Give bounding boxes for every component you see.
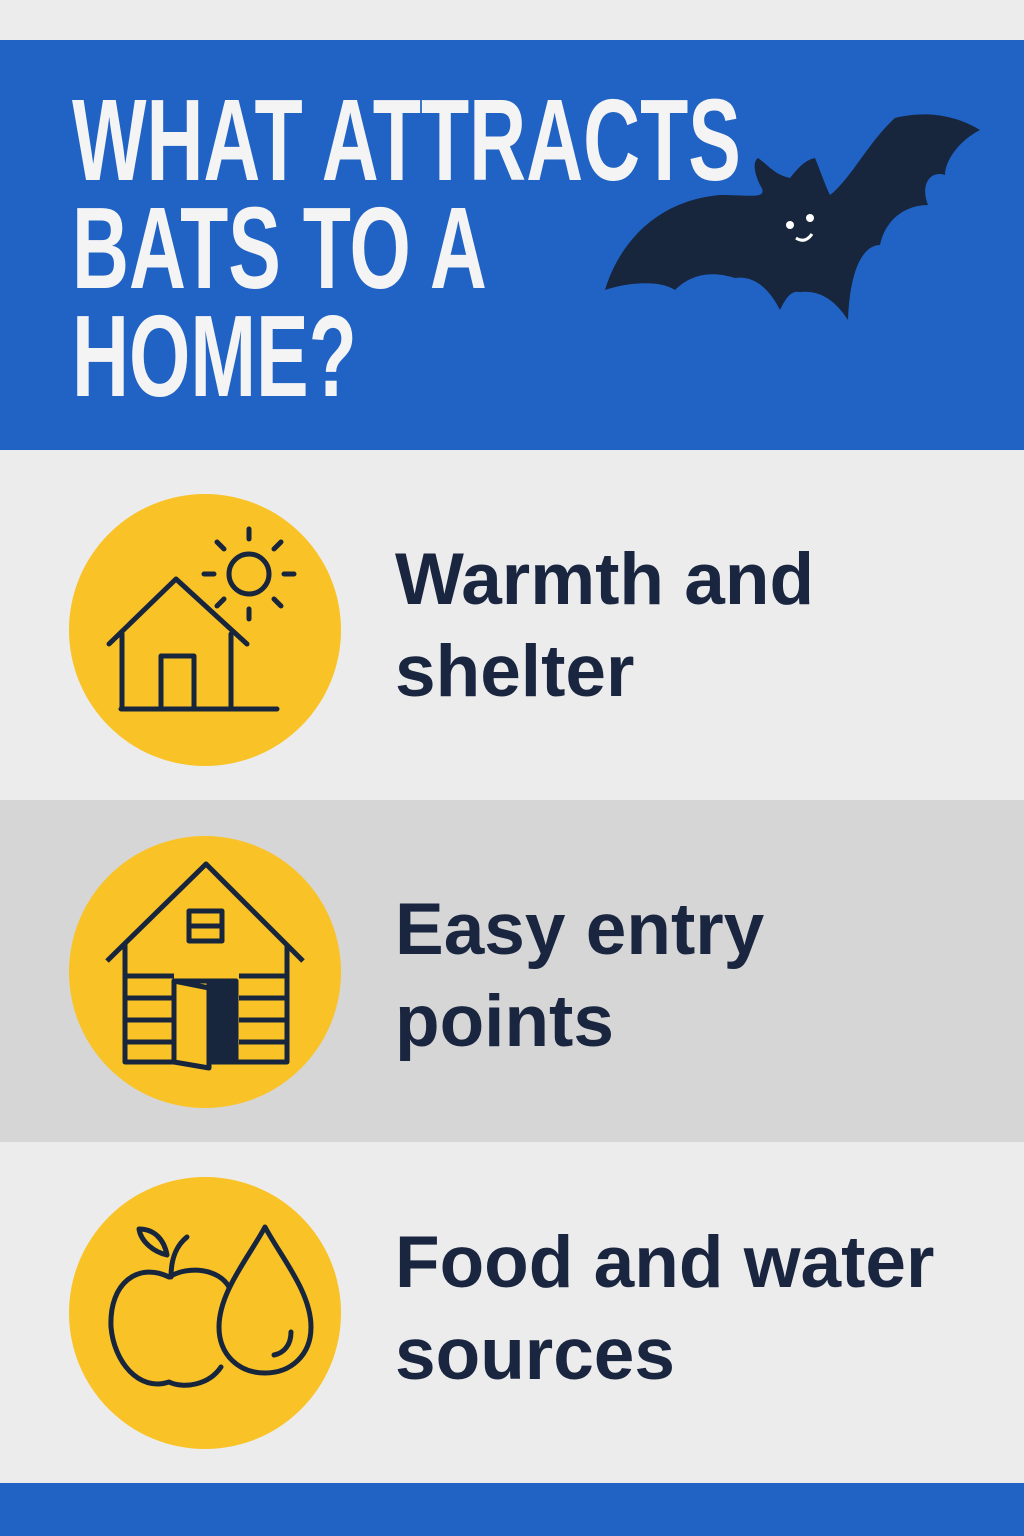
title xyxy=(72,75,741,421)
text: shelter xyxy=(395,631,634,712)
text: Food and water xyxy=(395,1222,934,1303)
text: Warmth and xyxy=(395,539,814,620)
icon: house with sun xyxy=(69,494,341,766)
text: sources xyxy=(395,1314,675,1395)
text xyxy=(395,1222,934,1395)
icon: cabin xyxy=(69,836,341,1108)
text xyxy=(395,539,814,712)
row 2 background xyxy=(0,800,1024,1142)
title: WHAT ATTRACTS xyxy=(72,75,741,205)
icon: bat xyxy=(605,114,980,320)
title: HOME? xyxy=(72,291,357,421)
title: BATS TO A xyxy=(72,183,487,313)
icon: apple and drop xyxy=(69,1177,341,1449)
item: warmth and shelter xyxy=(69,494,814,766)
header band xyxy=(0,40,1024,450)
text: points xyxy=(395,981,614,1062)
bottom band xyxy=(0,1483,1024,1536)
text: Easy entry xyxy=(395,889,764,970)
item: easy entry points xyxy=(69,836,764,1108)
text xyxy=(395,889,764,1062)
item: food and water xyxy=(69,1177,934,1449)
